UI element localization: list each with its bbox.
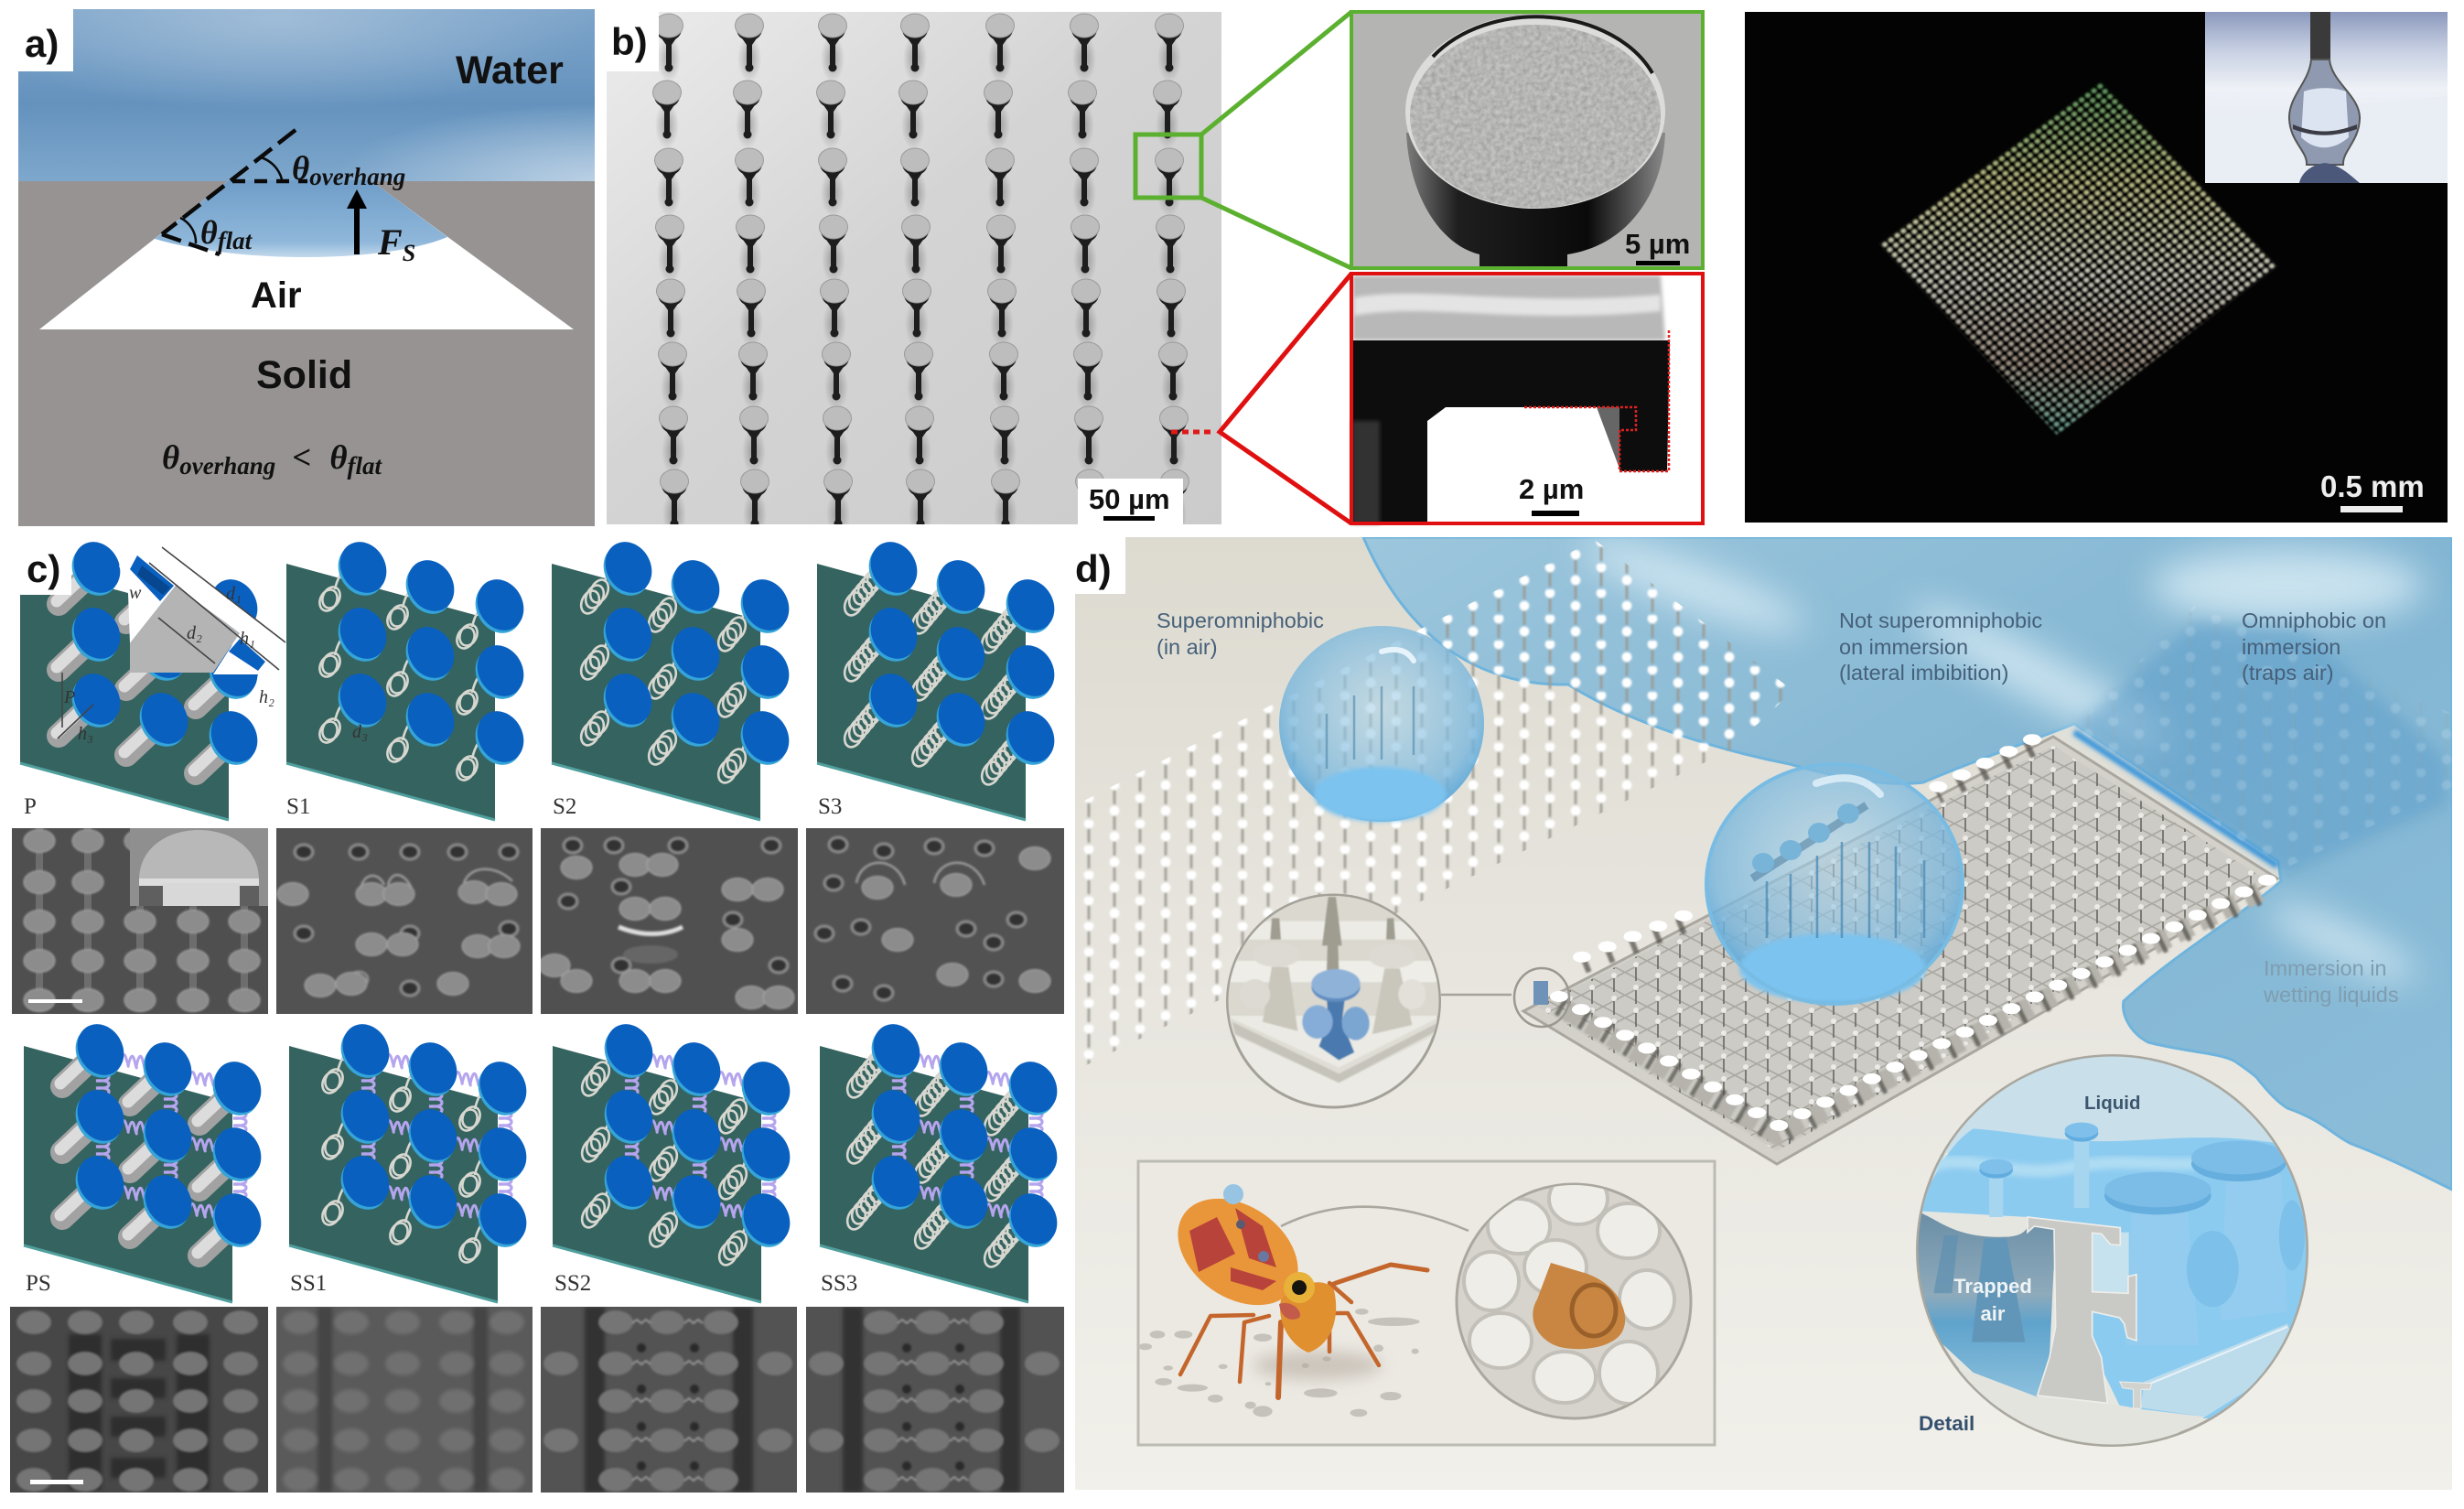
small marker circle and blue unit (1514, 968, 1569, 1027)
caption SS2: SS2 (554, 1271, 591, 1296)
panel c: SEM row 2 (10, 1307, 1064, 1509)
label notch b: b) (611, 20, 648, 63)
green selection box (1135, 135, 1201, 198)
diamond array (1879, 81, 2277, 435)
edge pillar caps lower right (1779, 880, 2267, 1126)
zoom lines: red (1220, 274, 1351, 523)
label notch d (1071, 537, 1125, 594)
magnified cross-section circle (1912, 1052, 2315, 1455)
schematic SS1 (289, 1016, 535, 1302)
label: F sub s: F (378, 221, 403, 263)
formula: theta overhang less than theta flat: < (292, 439, 311, 477)
scattered eggs (1138, 1309, 1420, 1417)
scale bar 50 um (1078, 479, 1183, 524)
SEM tile P (12, 828, 268, 1014)
liquid sheet (1363, 524, 2452, 1190)
panel c: schematic row 2 (24, 1016, 1066, 1302)
free-standing pillar field (1075, 537, 1807, 1086)
label: immersion in wetting liquids: Immersion in (2264, 956, 2387, 980)
magnified pillar unit circle (1226, 893, 1441, 1109)
caption SS3: SS3 (821, 1271, 857, 1296)
label: detail: Detail (1919, 1412, 1974, 1435)
label notch a: a) (25, 22, 59, 65)
water layer (18, 9, 595, 181)
springtail insect (1157, 1177, 1427, 1397)
dimension overlay on P: h₂ (259, 687, 274, 707)
bottom edge rib band (1566, 891, 2260, 1135)
inset box: springtail (1138, 1161, 1715, 1445)
connection arc (1281, 1207, 1469, 1231)
label: immersion in wetting liquids: wetting liquids (2263, 983, 2399, 1007)
label: theta overhang: overhang (309, 163, 405, 190)
scale bar 2 um: 2 µm (1519, 473, 1584, 505)
label: omniphobic on immersion: immersion (2242, 635, 2340, 659)
schematic S3 (817, 534, 1063, 820)
SEM tile SS3 (806, 1307, 1064, 1493)
formula: theta overhang less than theta flat: θ (329, 439, 348, 477)
caption SS1: SS1 (290, 1271, 327, 1296)
panel: optical image of pillar array (1745, 12, 2448, 523)
scale bar (28, 999, 82, 1003)
caption P: P (24, 794, 37, 819)
label notch c (20, 540, 71, 595)
arrow: surface force (347, 189, 367, 254)
pillar plate on substrate (1523, 737, 2277, 1164)
label: superomniphobic in air: Superomniphobic (1157, 609, 1324, 632)
label notch b (607, 12, 659, 71)
schematic SS3 (820, 1016, 1066, 1302)
label: solid: Solid (256, 353, 352, 397)
SEM inset: pillar cross section (130, 828, 268, 906)
rail (2141, 1324, 2299, 1417)
contact angle dashed lines (162, 130, 307, 254)
label: liquid: Liquid (2084, 1093, 2140, 1114)
SEM tile S1 (276, 828, 533, 1014)
pillar cap disc (1405, 15, 1665, 209)
label notch c: c) (27, 547, 60, 590)
label: F sub s: S (403, 240, 415, 266)
label: omniphobic on immersion: (traps air) (2242, 661, 2334, 684)
inset: droplet photo (2205, 12, 2448, 183)
label: theta flat: flat (218, 227, 253, 254)
formula: theta overhang less than theta flat: θ (162, 439, 179, 477)
schematic SS2 (553, 1016, 799, 1302)
red dotted marker (1171, 430, 1213, 434)
SEM tile S2 (541, 828, 798, 1014)
SEM tile SS1 (276, 1307, 533, 1493)
dimension overlay on P: w (129, 583, 142, 603)
SEM tile SS2 (541, 1307, 797, 1493)
label notch a (18, 9, 73, 71)
dimension overlay on P: P (63, 687, 75, 707)
panel c: SEM row 1 (12, 828, 1064, 1014)
dimension overlay on P: d₁ (226, 584, 242, 604)
panel b inset: pillar cap zoom (1351, 12, 1703, 268)
label: not superomniphobic on immersion: Not superomniphobic (1839, 609, 2042, 632)
formula: theta overhang less than theta flat: overhang (179, 452, 275, 480)
label: water: Water (456, 49, 564, 92)
dimension overlay on P (58, 544, 285, 744)
panel d: illustrated wetting scene (1071, 524, 2452, 1490)
panel c: schematic row 1 (20, 534, 1063, 820)
section of overhanging pillar (2028, 1217, 2136, 1403)
formula: theta overhang less than theta flat: flat (348, 452, 383, 480)
label: theta flat: θ (200, 214, 218, 251)
upper droplet (1279, 626, 1484, 822)
label: theta overhang: θ (292, 150, 309, 188)
schematic PS (24, 1016, 270, 1302)
schematic P (20, 534, 266, 820)
dimension overlay on P: d₂ (187, 623, 202, 643)
SEM tile PS (10, 1307, 268, 1493)
scale bar 50 um: 50 µm (1089, 483, 1170, 515)
SEM tile S3 (806, 828, 1064, 1014)
schematic S2 (552, 534, 798, 820)
scale bar 5 um: 5 µm (1625, 228, 1690, 260)
edge pillars upper left (1576, 739, 2032, 968)
label: superomniphobic in air: (in air) (1157, 635, 1218, 659)
front big pillars (2125, 1174, 2287, 1345)
label: trapped air: air (1981, 1302, 2006, 1325)
dimension overlay on P: h₃ (78, 724, 93, 744)
label: trapped air: Trapped (1953, 1275, 2032, 1298)
air pocket (1915, 1211, 2056, 1397)
window in section (2093, 1233, 2129, 1293)
zoom lines: green (1201, 12, 1351, 268)
label: omniphobic on immersion: Omniphobic on (2242, 609, 2386, 632)
lower droplet (1705, 763, 1964, 1005)
air pocket with meniscus (39, 180, 574, 329)
caption S2: S2 (553, 794, 576, 819)
label: not superomniphobic on immersion: (lateral imbibition) (1839, 661, 2008, 684)
schematic S1: d₃ (352, 722, 368, 742)
caption S1: S1 (286, 794, 310, 819)
scale bar (30, 1480, 83, 1484)
label: not superomniphobic on immersion: on immersion (1839, 635, 1968, 659)
panel b: SEM pillar array (607, 12, 1221, 538)
label notch d: d) (1075, 547, 1112, 590)
panel a: water air solid diagram (18, 9, 595, 526)
panel b inset: overhang cross section (1351, 274, 1703, 523)
schematic S1 (286, 534, 533, 820)
caption S3: S3 (818, 794, 842, 819)
callout line to small circle (1441, 994, 1512, 996)
scale bar 0.5 mm: 0.5 mm (2320, 469, 2425, 503)
caption PS: PS (26, 1271, 51, 1296)
back pillars (1989, 1137, 2089, 1217)
magnified cuticle circle (1457, 1173, 1691, 1418)
omniphobic strip pillars fading (2083, 606, 2452, 866)
edge pillar caps lower left (1559, 997, 1779, 1126)
dimension overlay on P: h₁ (240, 629, 255, 649)
pillar body (1406, 133, 1665, 268)
label: air: Air (251, 275, 302, 316)
